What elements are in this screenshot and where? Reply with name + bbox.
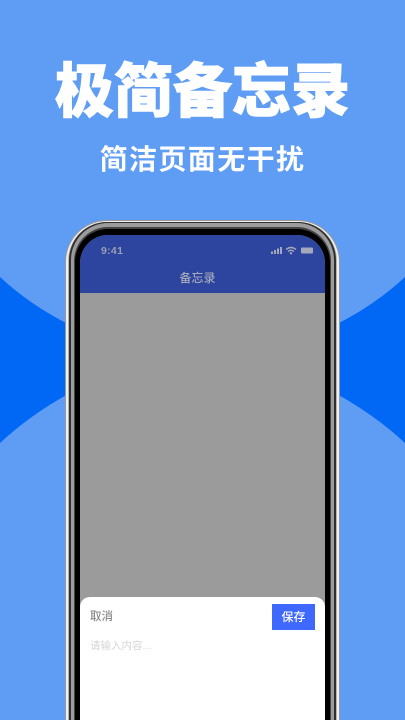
- screen: [80, 235, 325, 720]
- save button: [272, 604, 315, 630]
- bottom sheet: [80, 597, 325, 720]
- save button: 保存: [281, 610, 306, 624]
- phone mockup: [65, 220, 340, 720]
- header title: 备忘录: [179, 271, 216, 285]
- phone inner dark ring: [74, 227, 331, 720]
- phone outer edge: [65, 220, 340, 720]
- status time: 9:41: [101, 245, 123, 257]
- phone steel ring: [71, 223, 334, 720]
- status icons: [271, 246, 313, 254]
- phone dark ring: [69, 222, 336, 720]
- title: 极简备忘录: [55, 59, 350, 125]
- subtitle: 简洁页面无干扰: [100, 144, 305, 175]
- phone grey ring: [68, 222, 337, 720]
- phone highlight ring: [66, 221, 339, 720]
- input placeholder: 请输入内容...: [90, 640, 151, 652]
- cancel: 取消: [90, 611, 113, 623]
- app header: [80, 235, 325, 293]
- phone black bezel: [75, 229, 330, 720]
